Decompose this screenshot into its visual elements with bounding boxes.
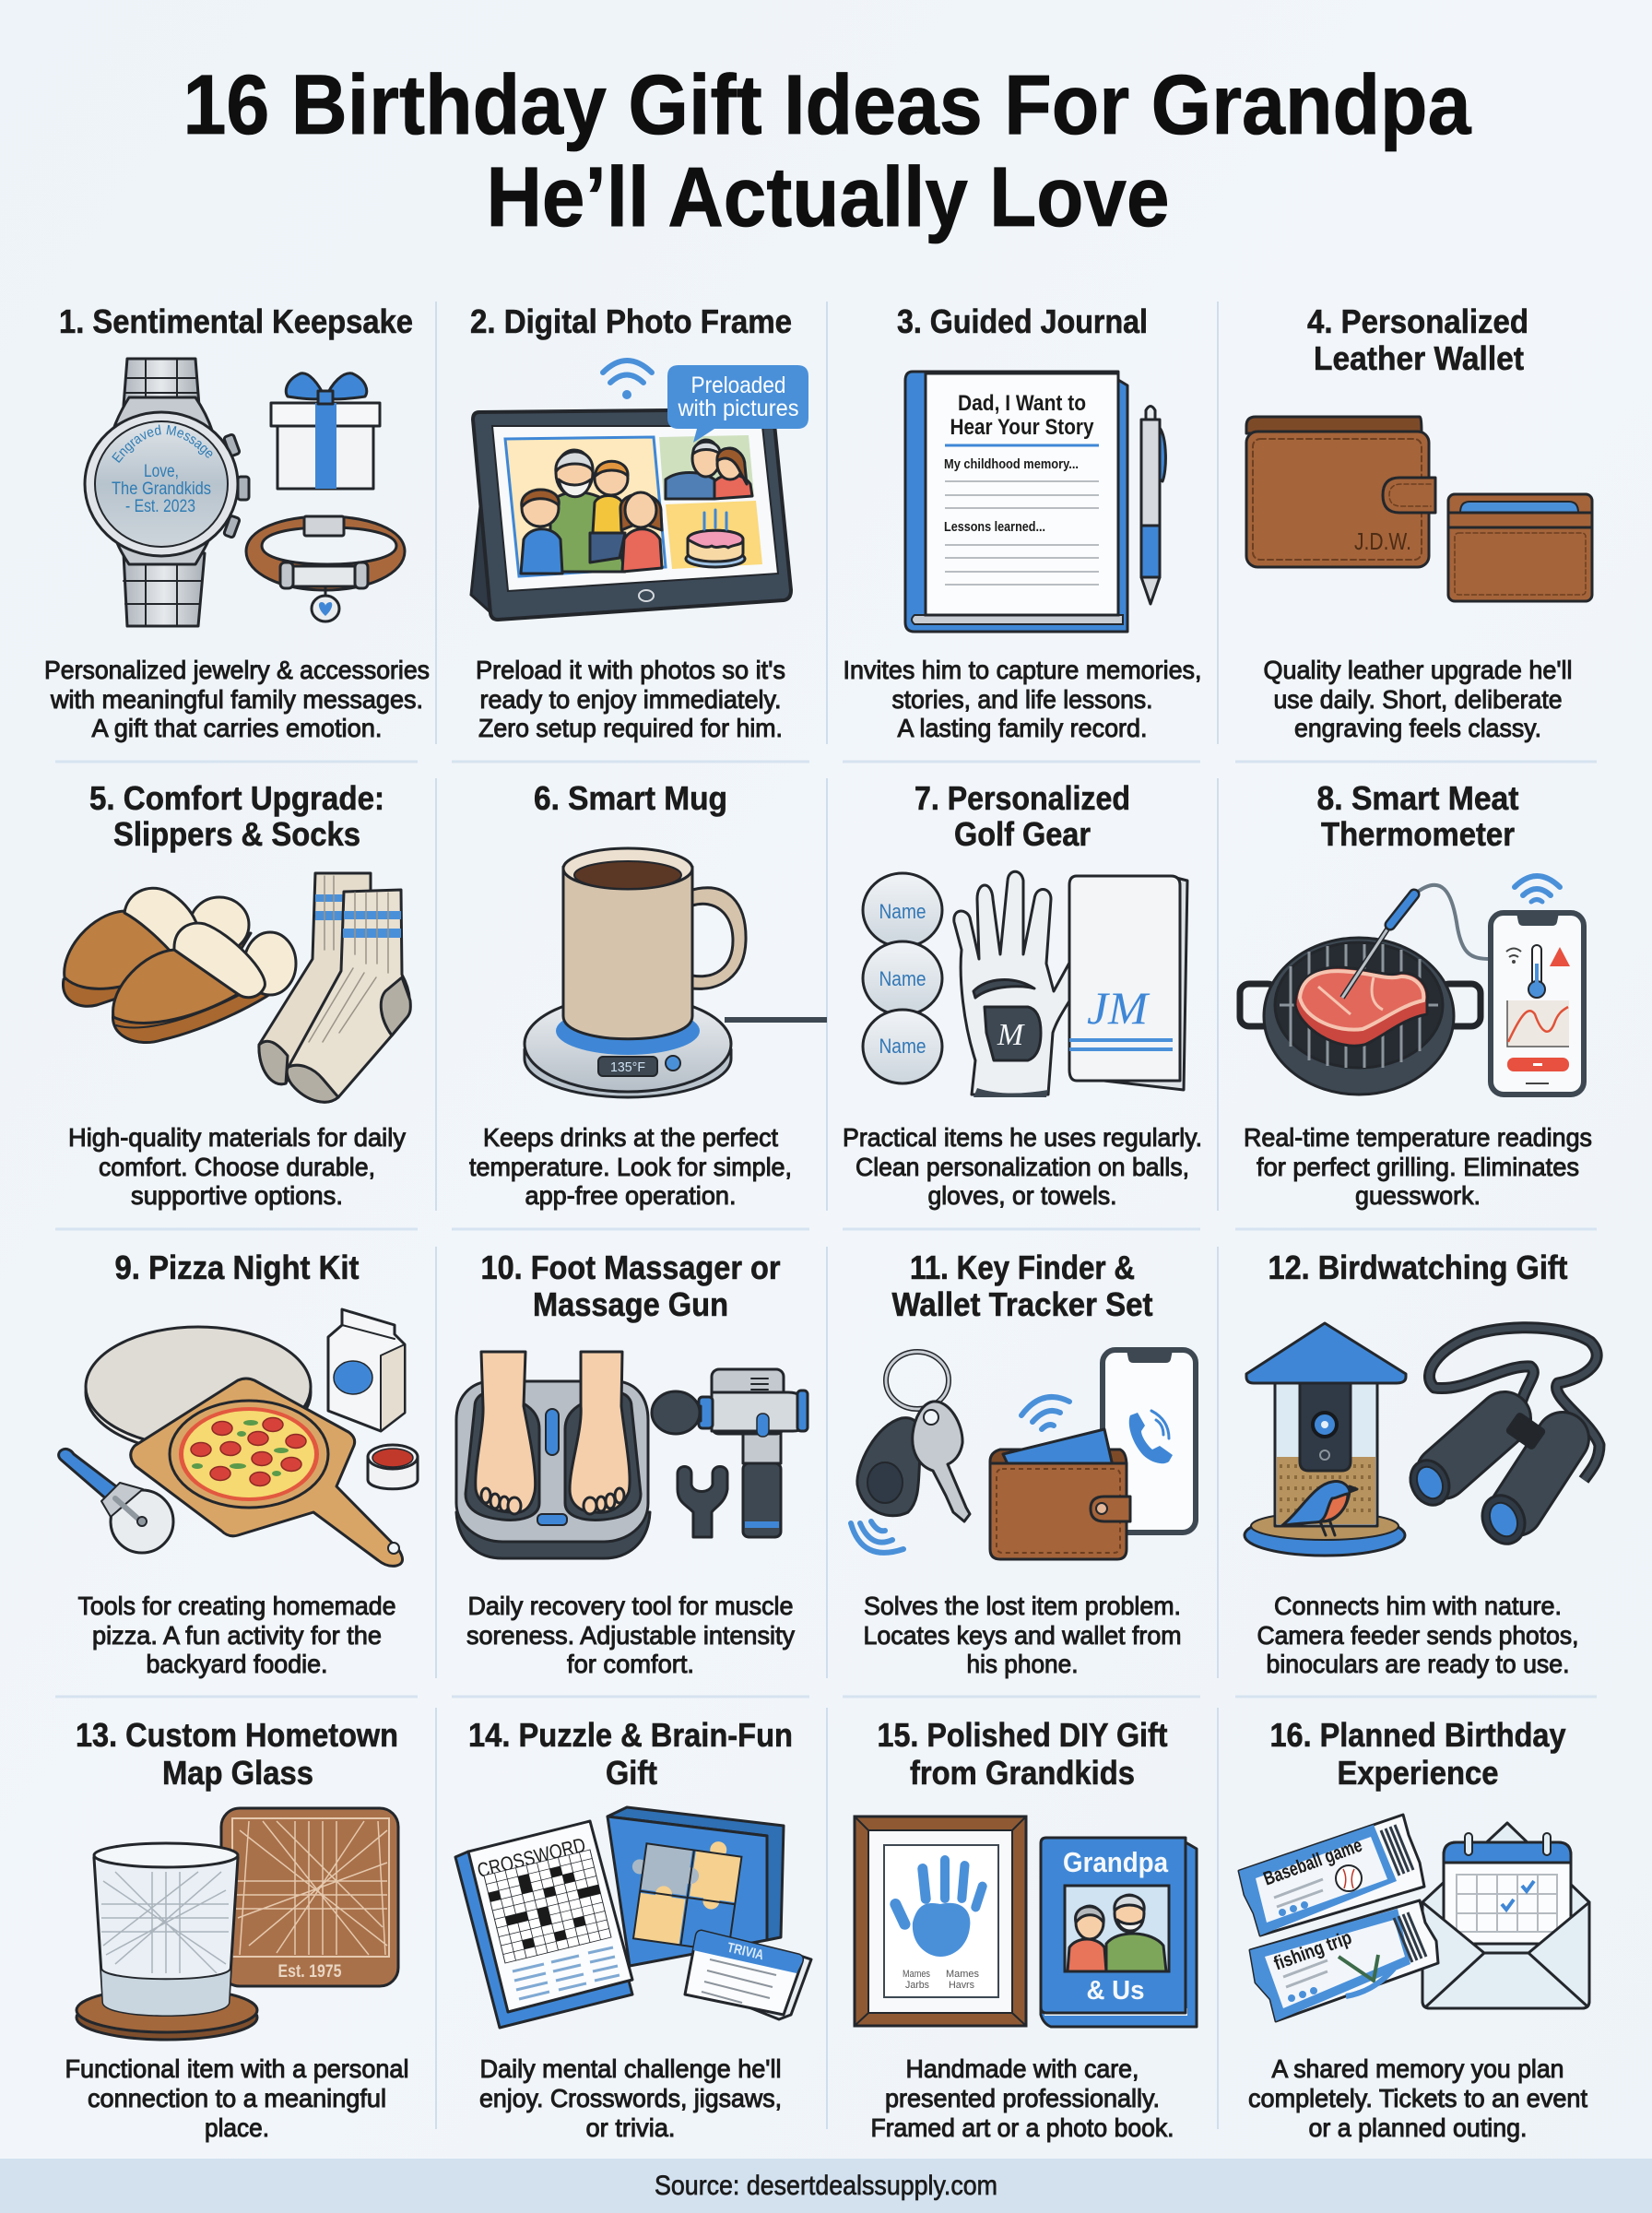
description: stories, and life lessons. [892, 685, 1152, 714]
heading: 11. Key Finder & [910, 1249, 1135, 1286]
icon: binoculars with strap [1403, 1328, 1599, 1551]
callout: preloaded with pictures: with pictures [678, 396, 798, 421]
panel: 11. Key Finder and Wallet Tracker Set [851, 1249, 1196, 1678]
heading [468, 1716, 793, 1792]
footer: source band [0, 2159, 1652, 2213]
icon: golf balls: Name [879, 900, 926, 923]
title: He’ll Actually Love [487, 150, 1169, 244]
description: or a planned outing. [1309, 2113, 1527, 2142]
icon: journal [905, 372, 1127, 632]
heading: Wallet Tracker Set [892, 1285, 1153, 1323]
icon: golf balls [863, 873, 942, 1083]
icon: pen [1141, 406, 1165, 604]
icon: framed handprint [855, 1817, 1026, 2026]
description: or trivia. [586, 2113, 675, 2142]
heading: from Grandkids [910, 1754, 1135, 1792]
icon: socks [259, 873, 410, 1102]
description: supportive options. [131, 1181, 343, 1210]
heading: 5. Comfort Upgrade: [89, 779, 384, 817]
description: his phone. [966, 1650, 1079, 1678]
description: Invites him to capture memories, [843, 656, 1202, 684]
icon: journal: Lessons learned... [944, 519, 1045, 535]
heading: Thermometer [1321, 815, 1515, 853]
heading: 14. Puzzle & Brain-Fun [468, 1716, 793, 1754]
description [863, 1592, 1182, 1678]
description: presented professionally. [885, 2084, 1160, 2112]
heading: 8. Smart Meat [1316, 779, 1519, 817]
icon: framed handprint: Mames [946, 1969, 979, 1980]
heading [89, 779, 384, 853]
icon: golf glove: M [997, 1018, 1025, 1052]
heading: 2. Digital Photo Frame [470, 302, 792, 340]
icon: key ring with tracker and key [857, 1352, 970, 1521]
icon: massage gun [652, 1369, 808, 1537]
description: Daily mental challenge he'll [479, 2054, 782, 2083]
icon: foot massager [456, 1352, 650, 1558]
heading: 4. Personalized [1307, 302, 1528, 340]
icon: crossword book: CROSSWORD [475, 1833, 588, 1882]
panel: 7. Personalized Golf Gear [843, 779, 1202, 1210]
description [1248, 2054, 1587, 2142]
heading [892, 1249, 1153, 1323]
description: for perfect grilling. Eliminates [1257, 1153, 1579, 1181]
icon: framed handprint: Havrs [949, 1980, 974, 1991]
footer: source band: Source: desertdealssupply.com [655, 2171, 997, 2201]
description: Real-time temperature readings [1244, 1123, 1592, 1152]
heading [1316, 779, 1519, 853]
description: Preload it with photos so it's [476, 656, 785, 684]
title [183, 58, 1471, 244]
icon: journal: Dad, I Want to [958, 391, 1086, 416]
callout: preloaded with pictures [667, 365, 808, 443]
icon: pizza peel and pizza [131, 1379, 403, 1566]
icon: golf balls: Name [879, 967, 926, 990]
description: ready to enjoy immediately. [479, 685, 782, 714]
panel: 1. Sentimental Keepsake: - Est. 2023 [125, 497, 195, 516]
description: temperature. Look for simple, [469, 1153, 792, 1181]
description [44, 656, 430, 742]
description: place. [205, 2113, 269, 2142]
heading: 12. Birdwatching Gift [1268, 1249, 1567, 1286]
description: gloves, or towels. [927, 1181, 1117, 1210]
panel: 15. Polished DIY Gift from Grandkids [855, 1716, 1197, 2142]
panel: 1. Sentimental Keepsake: Engraved Message [112, 424, 212, 463]
heading [76, 1716, 398, 1792]
description [479, 2054, 782, 2142]
panel: 10. Foot Massager or Massage Gun [456, 1249, 808, 1678]
heading [878, 1716, 1168, 1792]
icon: round coaster and etched glass [77, 1843, 257, 2040]
heading: Massage Gun [533, 1285, 728, 1323]
icon: phone app [1491, 913, 1584, 1095]
icon: photo book [1041, 1838, 1197, 2027]
icon: wifi [1515, 876, 1560, 902]
icon: pizza stone [86, 1327, 311, 1452]
description: A lasting family record. [898, 714, 1147, 742]
description [469, 1123, 792, 1210]
description [870, 2054, 1174, 2142]
engraved initials: J.D.W. [1354, 527, 1411, 555]
icon: map coaster [221, 1808, 398, 1986]
icon: jigsaw box [608, 1807, 784, 1966]
icon: digital frame [471, 409, 791, 620]
panel: 5. Comfort Upgrade [63, 779, 410, 1210]
icon: mug on warmer [525, 848, 827, 1097]
icon: leather bracelet [246, 516, 405, 621]
icon: signal waves [851, 1397, 1069, 1553]
icon: golf glove [954, 871, 1089, 1097]
panel: 4. Personalized Leather Wallet [1246, 302, 1592, 742]
heading: Slippers & Socks [113, 815, 360, 853]
panel: 14. Puzzle and Brain-Fun Gift [455, 1716, 811, 2142]
panel: 12. Birdwatching Gift [1245, 1249, 1599, 1678]
description: Camera feeder sends photos, [1257, 1621, 1578, 1650]
panel: 16. Planned Birthday Experience [1239, 1716, 1589, 2142]
panel: 13. Custom Hometown Map Glass [65, 1716, 409, 2142]
description: app-free operation. [525, 1181, 736, 1210]
heading: Gift [606, 1754, 657, 1792]
description: Daily recovery tool for muscle [468, 1592, 793, 1620]
heading: Experience [1337, 1754, 1499, 1792]
icon: fishing ticket: fishing trip [1271, 1927, 1354, 1975]
description: soreness. Adjustable intensity [466, 1621, 795, 1650]
heading: 1. Sentimental Keepsake [59, 302, 413, 340]
heading [1307, 302, 1528, 377]
icon: envelope and calendar [1422, 1823, 1589, 2008]
heading: 10. Foot Massager or [481, 1249, 780, 1286]
description: for comfort. [567, 1650, 694, 1678]
icon: grill with steak [1240, 938, 1481, 1095]
icon: flour bag [328, 1309, 405, 1431]
description [65, 2054, 409, 2142]
icon: fishing ticket [1250, 1900, 1438, 2021]
panel: 9. Pizza Night Kit [59, 1249, 418, 1678]
icon: monogram towel [1069, 876, 1187, 1090]
description: connection to a meaningful [88, 2084, 386, 2112]
heading: 16. Planned Birthday [1270, 1716, 1565, 1754]
icon: framed handprint: Jarbs [905, 1980, 929, 1991]
description [1263, 656, 1573, 742]
heading [481, 1249, 780, 1323]
description: use daily. Short, deliberate [1274, 685, 1562, 714]
icon: wallet with tracker card [990, 1429, 1130, 1559]
description: Framed art or a photo book. [870, 2113, 1174, 2142]
description: with meaningful family messages. [50, 685, 423, 714]
icon: engraved watch [85, 359, 249, 626]
icon: journal: My childhood memory... [944, 456, 1079, 472]
description: binoculars are ready to use. [1267, 1650, 1569, 1678]
description [466, 1592, 795, 1678]
icon: massage attachment [678, 1466, 727, 1537]
description: completely. Tickets to an event [1248, 2084, 1587, 2112]
description: A gift that carries emotion. [92, 714, 382, 742]
icon: trivia cards: TRIVIA [726, 1940, 765, 1963]
description: engraving feels classy. [1294, 714, 1541, 742]
description: A shared memory you plan [1272, 2054, 1564, 2083]
description: enjoy. Crosswords, jigsaws, [479, 2084, 782, 2112]
icon: phone [1103, 1350, 1196, 1533]
callout: preloaded with pictures: Preloaded [691, 373, 785, 398]
icon: leather wallet [1246, 417, 1435, 567]
icon: baseball ticket: Baseball game [1261, 1835, 1365, 1890]
description: Solves the lost item problem. [864, 1592, 1181, 1620]
description [1257, 1592, 1578, 1678]
icon: probe and cable [1342, 885, 1491, 998]
description: Practical items he uses regularly. [843, 1123, 1202, 1152]
description: Functional item with a personal [65, 2054, 409, 2083]
description: High-quality materials for daily [68, 1123, 406, 1152]
icon: map coaster: Est. 1975 [278, 1962, 342, 1982]
heading: Map Glass [162, 1754, 313, 1792]
description: Locates keys and wallet from [863, 1621, 1182, 1650]
description [77, 1592, 396, 1678]
panel: 1. Sentimental Keepsake [44, 302, 430, 743]
description [843, 1123, 1202, 1210]
heading [914, 779, 1130, 853]
icon: monogram towel: JM [1087, 982, 1150, 1034]
title: 16 Birthday Gift Ideas For Grandpa [183, 58, 1471, 152]
description: Tools for creating homemade [77, 1592, 396, 1620]
heading: 3. Guided Journal [897, 302, 1148, 340]
icon: sauce cup [368, 1445, 418, 1489]
heading [1270, 1716, 1565, 1792]
panel: 2. Digital Photo Frame [470, 302, 808, 742]
heading: 13. Custom Hometown [76, 1716, 398, 1754]
icon: trivia cards [685, 1931, 811, 2019]
description: Handmade with care, [905, 2054, 1139, 2083]
icon: photo book: & Us [1086, 1976, 1145, 2006]
icon: pizza cutter [59, 1449, 173, 1553]
heading: 7. Personalized [914, 779, 1130, 817]
description: comfort. Choose durable, [99, 1153, 375, 1181]
heading: 6. Smart Mug [534, 779, 727, 817]
icon: crossword book [455, 1821, 632, 2028]
heading: 9. Pizza Night Kit [114, 1249, 360, 1286]
icon: camera bird feeder [1245, 1323, 1406, 1556]
description: pizza. A fun activity for the [92, 1621, 382, 1650]
description [476, 656, 785, 742]
panel: 1. Sentimental Keepsake: Love, [144, 462, 179, 481]
description: backyard foodie. [146, 1650, 328, 1678]
icon: gift box [271, 373, 380, 489]
panel: 1. Sentimental Keepsake: The Grandkids [112, 479, 211, 499]
description [68, 1123, 406, 1210]
icon: mug on warmer: 135°F [610, 1059, 645, 1075]
icon: wifi [603, 361, 652, 399]
icon: card holder [1448, 494, 1592, 601]
panel: 8. Smart Meat Thermometer [1240, 779, 1592, 1210]
icon: framed handprint: Mames [903, 1969, 930, 1980]
description: Zero setup required for him. [478, 714, 783, 742]
panel: 3. Guided Journal [843, 302, 1202, 742]
description: guesswork. [1355, 1181, 1481, 1210]
icon: golf balls: Name [879, 1035, 926, 1058]
description [1244, 1123, 1592, 1210]
description: Clean personalization on balls, [856, 1153, 1189, 1181]
description: Keeps drinks at the perfect [483, 1123, 778, 1152]
icon: slippers [63, 888, 296, 1043]
icon: photo book: Grandpa [1063, 1846, 1169, 1878]
icon: journal: Hear Your Story [950, 415, 1094, 440]
panel: 6. Smart Mug [469, 779, 827, 1210]
heading: Leather Wallet [1314, 339, 1524, 377]
icon: baseball ticket [1239, 1815, 1424, 1935]
heading: 15. Polished DIY Gift [878, 1716, 1168, 1754]
description: Personalized jewelry & accessories [44, 656, 430, 684]
description: Quality leather upgrade he'll [1263, 656, 1573, 684]
heading: Golf Gear [954, 815, 1091, 853]
description [843, 656, 1202, 742]
description: Connects him with nature. [1274, 1592, 1562, 1620]
